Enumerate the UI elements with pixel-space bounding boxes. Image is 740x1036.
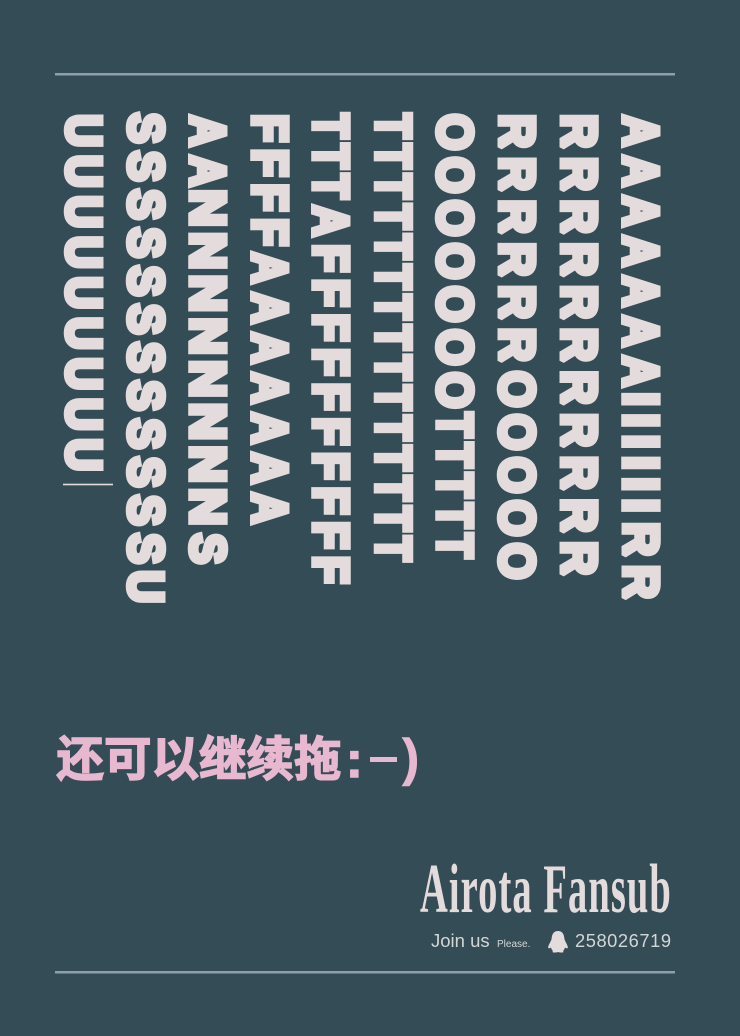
column 8: AANNNNNNNNS: NNNNNNNN bbox=[180, 189, 236, 531]
column 6: TTTAFFFFFFFFFF: FFFFFFFFFF bbox=[302, 244, 357, 590]
column 1: AAAAAAAIIIIIIRR: AAAAAAA bbox=[613, 115, 669, 396]
column 2: RRRRRRRRRRR: RRRRRRRRRRR bbox=[550, 114, 606, 584]
column 7: FFFFAAAAAAA: AAAAAAA bbox=[242, 252, 298, 533]
column 4: OOOOOOOTTTTT: TTTTT bbox=[427, 412, 483, 563]
column 6: TTTAFFFFFFFFFF: TTT bbox=[303, 114, 359, 204]
column 7: FFFFAAAAAAA bbox=[241, 114, 298, 533]
column 7: FFFFAAAAAAA: FFFF bbox=[241, 114, 296, 253]
column 10: UUUUUUUUU with cursor: UUUUUUUUU bbox=[55, 114, 110, 479]
column 1: AAAAAAAIIIIIIRR bbox=[612, 115, 669, 608]
column 3: RRRRRROOOOO: OOOOO bbox=[488, 371, 544, 586]
column 3: RRRRRROOOOO bbox=[488, 114, 544, 586]
column 8: AANNNNNNNNS: AA bbox=[180, 115, 236, 196]
column 8: AANNNNNNNNS: S bbox=[179, 533, 234, 572]
column 3: RRRRRROOOOO: RRRRRR bbox=[488, 114, 544, 370]
text: join us: Join us bbox=[431, 930, 490, 951]
icon: penguin bbox=[548, 931, 568, 952]
column 9: SSSSSSSSSSSSU: U bbox=[117, 570, 172, 611]
column 1: AAAAAAAIIIIIIRR: RR bbox=[612, 522, 668, 608]
text: join us: Please. bbox=[497, 939, 530, 950]
heading: pink slogan: ) bbox=[402, 729, 419, 787]
logo: Airota Fansub: Airota Fansub bbox=[420, 851, 671, 928]
column 4: OOOOOOOTTTTT bbox=[426, 114, 483, 563]
column 4: OOOOOOOTTTTT: OOOOOOO bbox=[426, 114, 482, 415]
heading: pink slogan: 还可以继续拖 bbox=[56, 734, 342, 787]
heading: pink slogan: : bbox=[346, 732, 363, 788]
column 9: SSSSSSSSSSSSU: SSSSSSSSSSSS bbox=[117, 113, 172, 571]
column 6: TTTAFFFFFFFFFF: A bbox=[303, 205, 359, 245]
text: join us bbox=[431, 930, 530, 951]
column 1: AAAAAAAIIIIIIRR: IIIIII bbox=[613, 392, 668, 520]
text: QQ number: 258026719 bbox=[575, 930, 671, 951]
column 5: TTTTTTTTTTTTTTT: TTTTTTTTTTTTTTT bbox=[365, 114, 421, 566]
